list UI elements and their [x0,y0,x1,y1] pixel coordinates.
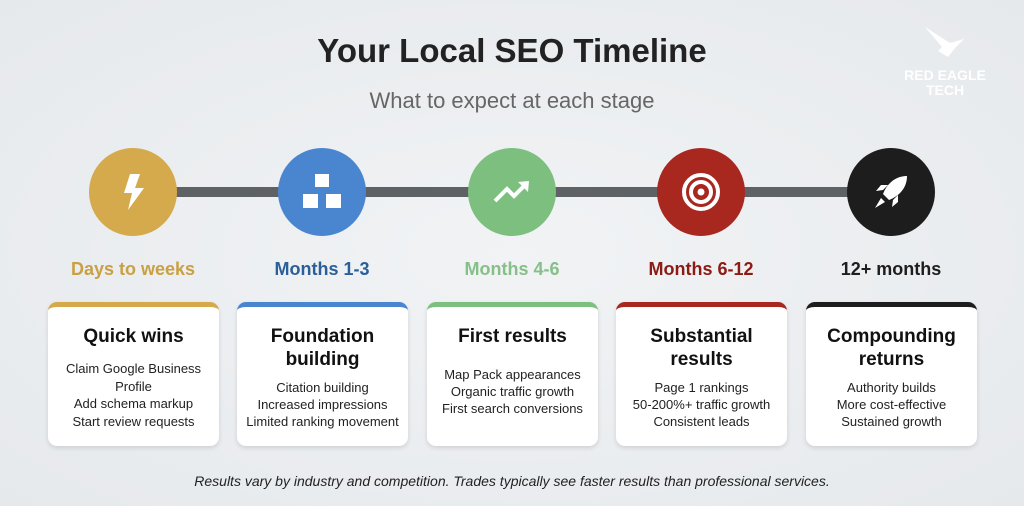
card: quick wins: Quick wins [83,326,184,347]
footer note: Results vary by industry and competition. Trades typically see faster results than professional services. [194,473,830,489]
card: first results: First search conversions [442,401,583,416]
card: substantial: 50-200%+ traffic growth [633,397,770,412]
card: first results: First results [458,326,567,347]
card: first results [427,302,598,446]
label: days to weeks: Days to weeks [71,259,195,279]
card: compounding: Sustained growth [841,414,942,429]
card: foundation: Limited ranking movement [246,414,399,429]
card: quick wins [48,302,219,446]
timeline line [133,187,891,197]
label: 12+ months: 12+ months [841,259,941,279]
logo [904,28,986,98]
card: compounding: Authority builds [847,380,936,395]
card: quick wins: Add schema markup [74,396,193,411]
card: foundation: building [286,349,359,370]
card: quick wins: Start review requests [72,414,195,428]
card: quick wins: Claim Google Business Profile [66,361,201,394]
logo: RED EAGLE [904,67,986,83]
card: compounding: Compounding [827,326,956,347]
icon: rocket [847,148,935,236]
card: substantial: Consistent leads [653,414,750,429]
subtitle: What to expect at each stage [370,88,654,113]
card: compounding: More cost-effective [837,397,946,412]
card: foundation: Foundation [271,326,374,347]
logo: TECH [926,82,964,98]
icon: target [657,148,745,236]
card: compounding [806,302,977,446]
card: first results: Organic traffic growth [451,384,574,399]
card: foundation: Increased impressions [257,397,388,412]
card: foundation [237,302,408,446]
icon: trend [468,148,556,236]
card: substantial: Substantial [650,326,753,347]
label: months 6-12: Months 6-12 [648,259,754,279]
label: months 4-6: Months 4-6 [464,259,560,279]
title: Your Local SEO Timeline [317,32,707,69]
label: months 1-3: Months 1-3 [274,259,370,279]
icon: lightning [89,148,177,236]
card: substantial: results [670,349,733,370]
icon: blocks [278,148,366,236]
card: first results: Map Pack appearances [444,367,581,382]
card: substantial: Page 1 rankings [655,380,748,395]
card: compounding: returns [859,349,924,370]
card: foundation: Citation building [276,380,369,395]
card: substantial [616,302,787,446]
